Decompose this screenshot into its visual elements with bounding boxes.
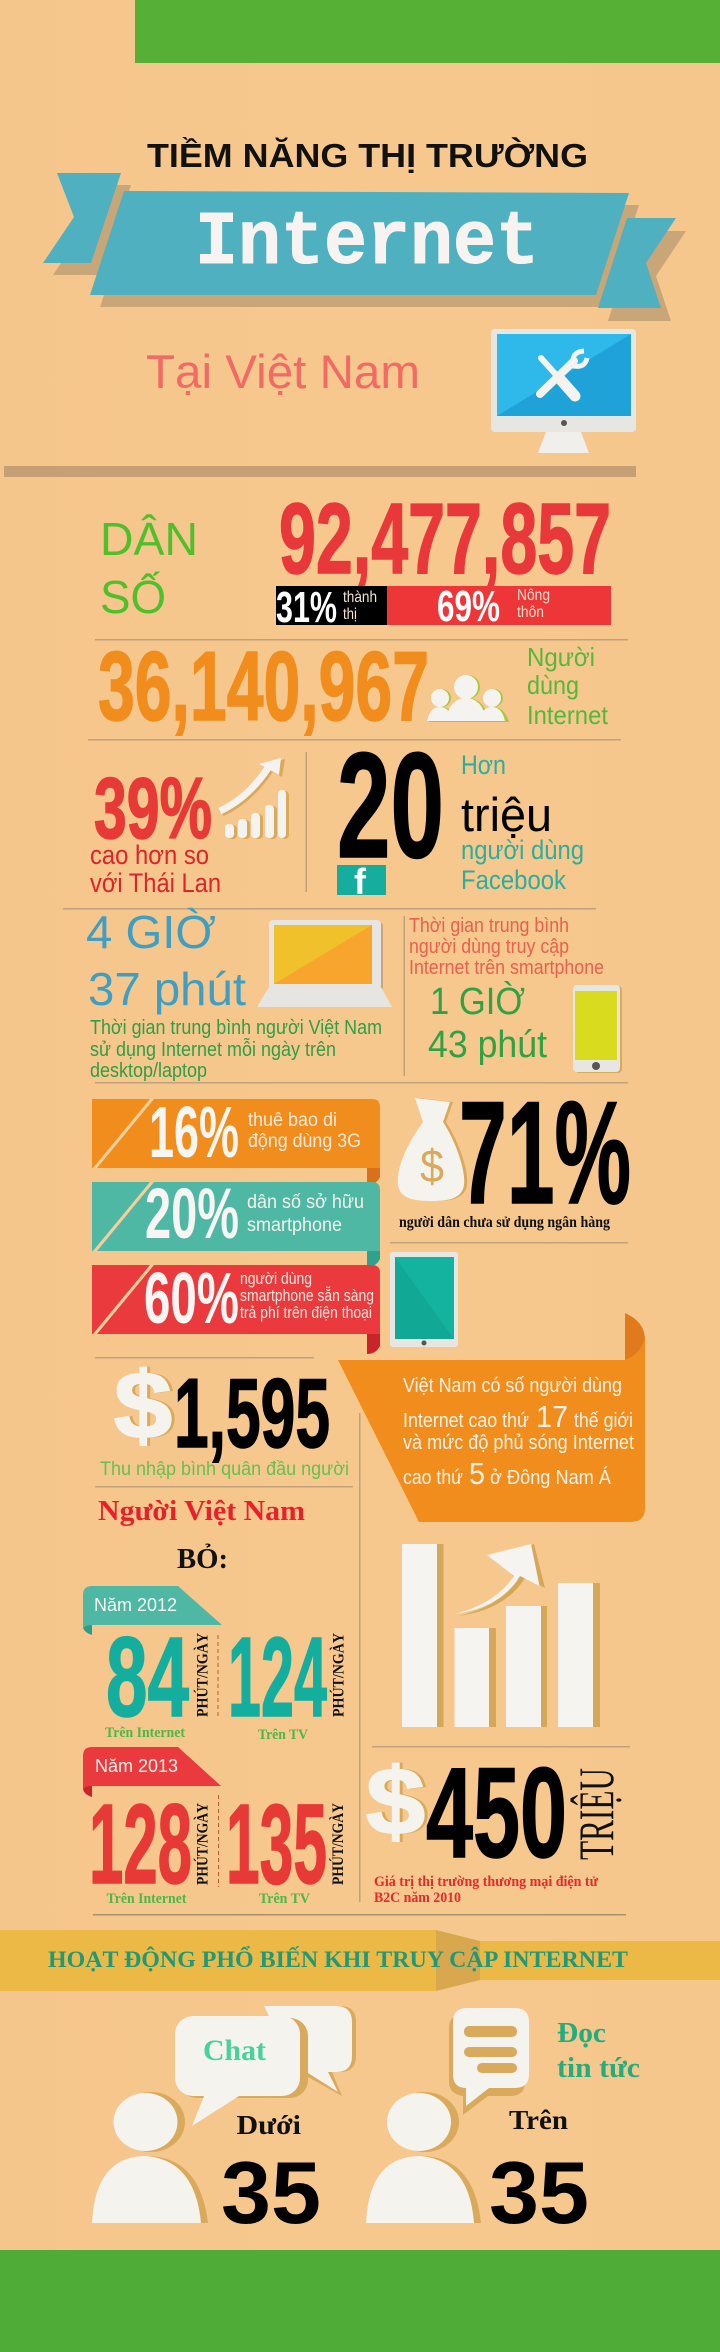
- stats 2013: 135: [226, 1781, 327, 1907]
- heading: Người Việt Nam: Người Việt Nam: [98, 1495, 305, 1527]
- icon: facebook: [337, 861, 386, 902]
- 39 percent stat: 39%: [94, 761, 212, 857]
- tag: 2013: [83, 1747, 221, 1797]
- stats 2012: PHÚT/NGÀY: [328, 1633, 348, 1717]
- desktop time description: sử dụng Internet mỗi ngày trên: [90, 1038, 336, 1061]
- label: read news: tin tức: [557, 2052, 640, 2084]
- ribbon: 16 percent: thuê bao di: [248, 1110, 337, 1131]
- facebook label: người dùng: [461, 835, 584, 865]
- market value label: [374, 1874, 599, 1906]
- internet users number: 36,140,967: [98, 631, 429, 741]
- icon: money bag: $: [420, 1140, 444, 1192]
- income stat: [114, 1353, 330, 1468]
- 20 million number: 20: [337, 721, 444, 889]
- callout: ranking: và mức độ phủ sóng Internet: [403, 1432, 634, 1454]
- tag: 2012: [83, 1586, 222, 1635]
- icon: monitor with tools: [491, 329, 636, 453]
- stats 2012: PHÚT/NGÀY: [192, 1633, 212, 1717]
- internet users label: dùng: [527, 670, 579, 700]
- top green band: [135, 0, 720, 63]
- subtitle: Tại Việt Nam: [146, 345, 420, 398]
- tag: 2013: Năm 2013: [95, 1756, 178, 1776]
- stats 2013: 128: [89, 1781, 192, 1907]
- urban rural split bar: thành: [343, 589, 377, 606]
- ribbon: 60 percent: smartphone sẵn sàng: [240, 1286, 374, 1305]
- number: 35 over: 35: [489, 2143, 589, 2242]
- icon: smartphone: [573, 985, 622, 1073]
- income stat: 1,595: [174, 1358, 330, 1468]
- tag: 2012: Năm 2012: [94, 1595, 177, 1615]
- population label: [100, 513, 198, 623]
- ribbon: 60 percent: trả phí trên điện thoại: [240, 1303, 372, 1322]
- smartphone time: 43 phút: [428, 1024, 547, 1066]
- 39 percent label: với Thái Lan: [90, 868, 221, 898]
- urban rural split bar: [276, 582, 611, 632]
- internet users label: Người: [527, 642, 595, 672]
- stats 2013: Trên TV: [259, 1891, 310, 1907]
- smartphone time description: người dùng truy cập: [409, 936, 569, 958]
- ribbon: 16 percent: động dùng 3G: [248, 1131, 361, 1152]
- callout: ranking: cao thứ: [403, 1467, 463, 1489]
- stats 2012: [105, 1614, 348, 1743]
- internet users label: Internet: [527, 700, 609, 730]
- icon: growth arrow: [220, 758, 289, 839]
- market value stat: $: [369, 1749, 428, 1855]
- market value stat: 450: [426, 1742, 567, 1885]
- icon: bar chart with arrow: [402, 1544, 600, 1727]
- stats 2012: Trên TV: [258, 1727, 308, 1743]
- number: 35 under: 35: [221, 2143, 321, 2242]
- 71 percent label: người dân chưa sử dụng ngân hàng: [399, 1214, 610, 1231]
- urban rural split bar: thôn: [517, 604, 544, 621]
- ribbon: 60 percent: 60%: [144, 1259, 239, 1339]
- title: TIỀM NĂNG THỊ TRƯỜNG: [147, 137, 588, 174]
- label: read news: [557, 2017, 640, 2084]
- callout: ranking: 5: [469, 1456, 485, 1491]
- market value label: B2C năm 2010: [374, 1890, 461, 1906]
- stats 2012: 124: [228, 1614, 327, 1740]
- icon: people: [427, 675, 509, 722]
- icon: news bubble: [449, 2008, 529, 2115]
- smartphone time description: Internet trên smartphone: [409, 957, 604, 979]
- smartphone time description: Thời gian trung bình: [409, 915, 569, 937]
- income stat: $: [117, 1353, 175, 1459]
- ribbon: 16 percent: [92, 1093, 380, 1185]
- population label: SỐ: [100, 571, 166, 623]
- market value label: Giá trị thị trường thương mại điện tử: [374, 1874, 599, 1890]
- stats 2013: Trên Internet: [106, 1891, 186, 1907]
- thick divider: [4, 466, 636, 477]
- ribbon: 20 percent: smartphone: [247, 1215, 342, 1236]
- stats 2013: PHÚT/NGÀY: [192, 1803, 212, 1885]
- population label: DÂN: [100, 513, 198, 565]
- stats 2012: 84: [106, 1614, 189, 1740]
- person: over 35: [366, 2092, 481, 2223]
- callout: ranking: ở Đông Nam Á: [490, 1466, 612, 1489]
- bottom green band: [0, 2250, 720, 2352]
- facebook label: [461, 750, 584, 895]
- callout: ranking: [338, 1313, 645, 1522]
- facebook label: Facebook: [461, 865, 566, 895]
- urban rural split bar: 31%: [276, 583, 337, 632]
- stats 2012: Trên Internet: [105, 1725, 185, 1741]
- heading: BỎ: BỎ:: [177, 1542, 228, 1575]
- desktop time description: Thời gian trung bình người Việt Nam: [90, 1017, 382, 1039]
- callout: ranking: 17: [536, 1399, 568, 1434]
- market value stat: $: [366, 1749, 425, 1855]
- desktop time: 4 GIỜ: [86, 906, 216, 958]
- income label: Thu nhập bình quân đầu người: [100, 1459, 349, 1480]
- facebook label: Hơn: [461, 750, 506, 780]
- ribbon: 16 percent: 16%: [149, 1093, 239, 1173]
- callout: ranking: Internet cao thứ: [403, 1410, 529, 1432]
- callout: ranking: Việt Nam có số người dùng: [403, 1375, 622, 1397]
- ribbon: 20 percent: dân số sở hữu: [247, 1192, 364, 1213]
- smartphone time: [428, 980, 547, 1066]
- 39 percent label: [90, 840, 221, 898]
- icon: chat bubbles: Chat: [203, 2034, 266, 2067]
- icon: chat bubbles: [175, 2006, 356, 2126]
- desktop time description: [90, 1017, 382, 1082]
- ribbon banner: [43, 173, 686, 321]
- icon: laptop: [257, 920, 392, 1007]
- stats 2013: PHÚT/NGÀY: [328, 1803, 347, 1885]
- market value stat: TRIỆU: [568, 1768, 624, 1860]
- section banner: [0, 1930, 720, 1991]
- label: over: Trên: [509, 2105, 568, 2135]
- ribbon: 20 percent: [92, 1175, 380, 1267]
- 39 percent label: cao hơn so: [90, 840, 209, 870]
- ribbon heading: Internet: [195, 200, 539, 286]
- facebook label: triệu: [461, 788, 552, 841]
- smartphone time: 1 GIỜ: [430, 980, 525, 1023]
- smartphone time description: [409, 915, 604, 979]
- person: under 35: [92, 2092, 208, 2223]
- urban rural split bar: Nông: [517, 587, 550, 604]
- section banner: HOẠT ĐỘNG PHỔ BIẾN KHI TRUY CẬP INTERNET: [48, 1946, 628, 1972]
- desktop time: 37 phút: [88, 963, 246, 1015]
- label: read news: Đọc: [557, 2017, 606, 2049]
- desktop time description: desktop/laptop: [90, 1060, 207, 1082]
- ribbon: 20 percent: 20%: [145, 1175, 239, 1254]
- icon: money bag: [398, 1098, 467, 1201]
- callout: ranking: thế giới: [574, 1410, 633, 1432]
- income stat: $: [114, 1353, 172, 1459]
- ribbon: 60 percent: người dùng: [240, 1269, 312, 1288]
- icon: facebook: f: [354, 861, 367, 902]
- urban rural split bar: thị: [343, 606, 357, 623]
- label: under: Dưới: [236, 2110, 302, 2140]
- internet users label: [527, 642, 609, 730]
- icon: tablet: [390, 1252, 458, 1347]
- desktop time: [86, 906, 246, 1015]
- ribbon: 60 percent: [92, 1259, 380, 1354]
- urban rural split bar: 69%: [437, 582, 500, 631]
